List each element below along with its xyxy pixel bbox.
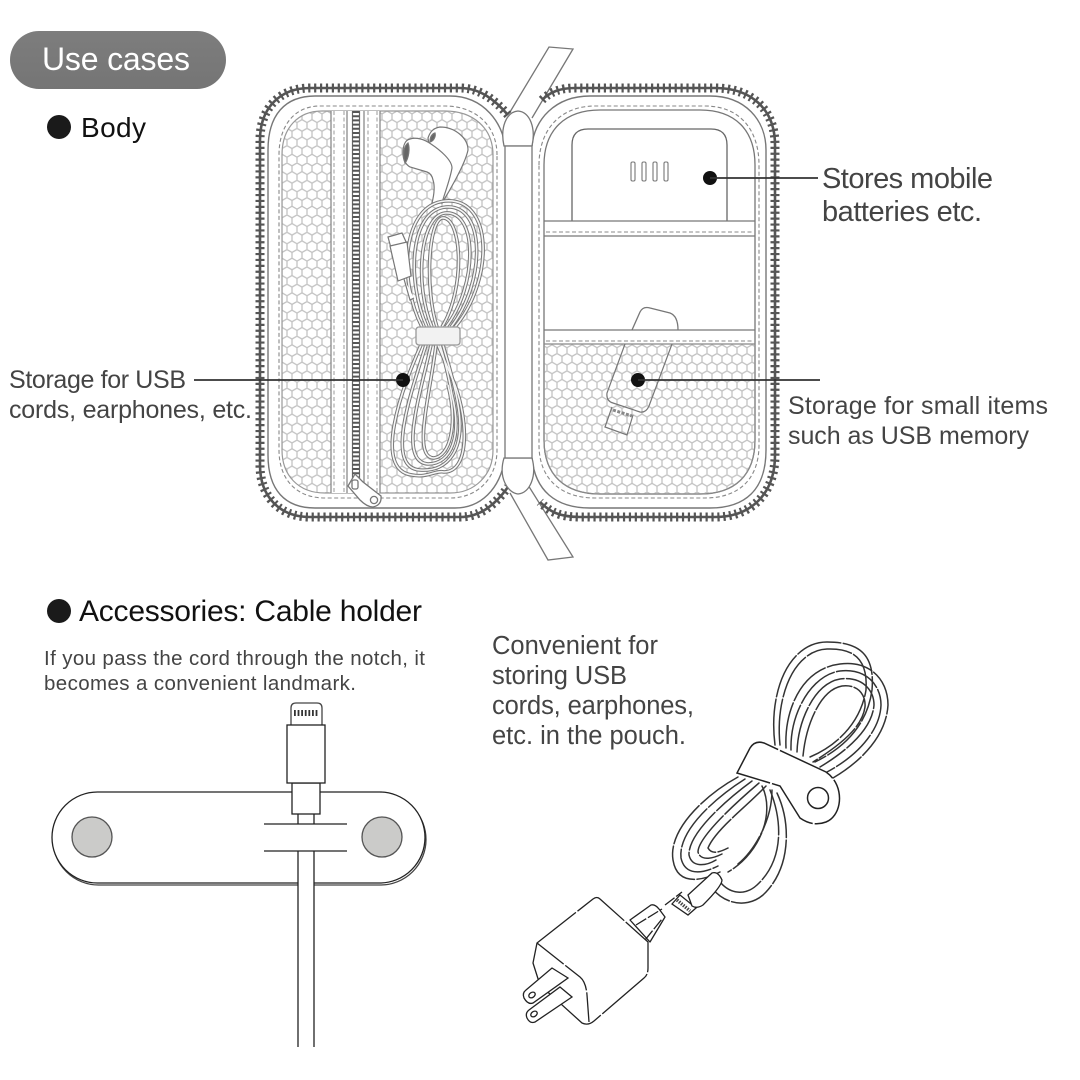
heading pill: Use cases: Use cases (42, 41, 190, 77)
text: pouch storage note: storing USB (492, 662, 627, 690)
strap (737, 742, 840, 824)
text: pouch storage note: etc. in the pouch. (492, 722, 686, 750)
right panel of pouch (532, 88, 775, 517)
text: notch description: If you pass the cord through the notch, it (44, 647, 425, 670)
illustration: open pouch (260, 47, 775, 560)
illustration: coiled cable with charger (523, 642, 888, 1024)
pouch strap top (510, 47, 573, 118)
pocket band upper (544, 221, 755, 236)
heading: Accessories: Accessories: Cable holder (79, 595, 422, 628)
mesh pocket left (282, 111, 493, 493)
text: notch description: becomes a convenient landmark. (44, 672, 356, 695)
label: storage for small items (788, 392, 1048, 450)
holder button right (362, 817, 402, 857)
inner compartment (544, 110, 755, 494)
callout dot: battery (703, 171, 717, 185)
label: storage for small items: such as USB memory (788, 422, 1030, 450)
charger block (533, 898, 665, 1024)
left panel of pouch (260, 88, 508, 517)
lightning plug (665, 873, 722, 915)
label: storage for USB cords: cords, earphones, etc. (9, 396, 252, 424)
holder button left (72, 817, 112, 857)
holder body (52, 792, 425, 883)
cord (298, 814, 314, 1047)
callout dot: USB (631, 373, 645, 387)
mesh pocket right (544, 344, 755, 494)
heading pill: Use cases (10, 31, 226, 89)
heading: Body (47, 112, 146, 143)
zipper strip (331, 111, 380, 493)
label: stores mobile batteries: batteries etc. (822, 196, 982, 228)
tucked item (632, 308, 678, 330)
illustration: cable holder (52, 703, 426, 1047)
pouch strap bottom (510, 485, 573, 560)
zipper pull (348, 474, 381, 507)
coiled cable (388, 201, 483, 476)
leader line: batteries (710, 177, 818, 179)
text: pouch storage note (492, 632, 694, 750)
USB memory (605, 344, 672, 435)
leader line: cords (194, 379, 403, 381)
cable band (416, 327, 460, 345)
earphones (403, 127, 468, 203)
label: stores mobile batteries (822, 163, 993, 228)
text: pouch storage note: Convenient for (492, 632, 658, 660)
callout dot: cord storage (396, 373, 410, 387)
leader line: small items (638, 379, 820, 381)
label: storage for USB cords (9, 366, 252, 424)
cable coil (673, 642, 888, 903)
cable connector (388, 233, 414, 300)
spine (502, 111, 534, 494)
pocket band lower (544, 330, 755, 341)
heading: Body: Body (81, 112, 146, 143)
notch slit (264, 824, 347, 851)
label: storage for USB cords: Storage for USB (9, 366, 186, 394)
label: storage for small items: Storage for small items (788, 392, 1048, 420)
label: stores mobile batteries: Stores mobile (822, 163, 993, 195)
lightning connector (287, 703, 325, 814)
mobile battery (572, 129, 727, 221)
plug prongs (523, 968, 572, 1022)
text: pouch storage note: cords, earphones, (492, 692, 694, 720)
text: notch description (44, 647, 425, 695)
